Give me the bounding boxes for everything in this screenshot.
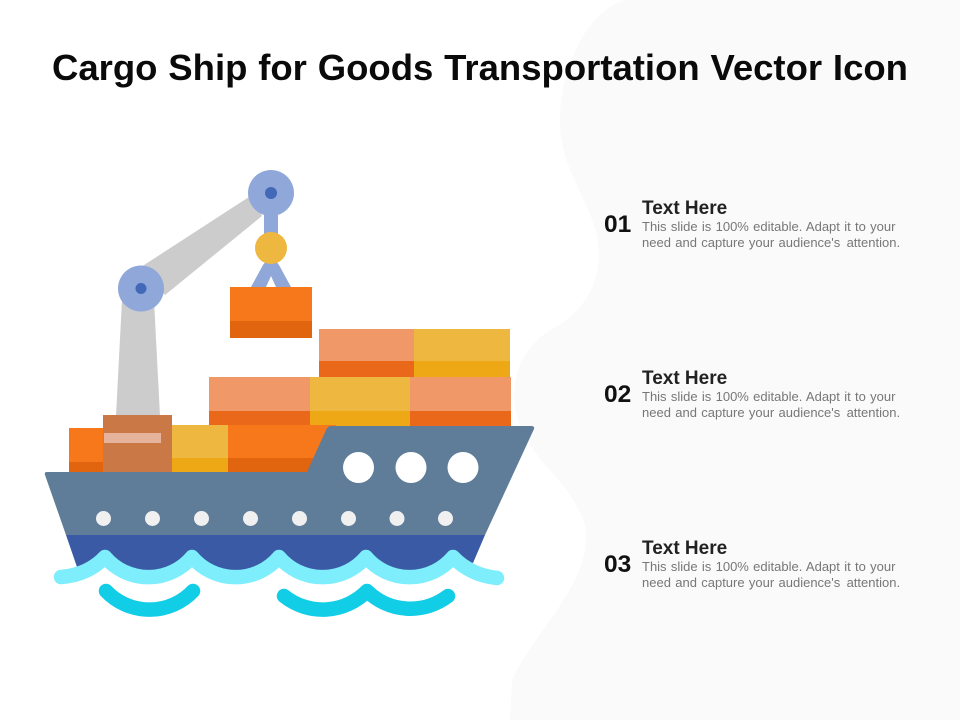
- lower row containers: [69, 415, 336, 473]
- description 03: [642, 559, 900, 590]
- number 03: 03: [604, 551, 631, 578]
- ship waterline: [66, 535, 485, 577]
- middle row containers: [209, 377, 511, 426]
- top row containers: [319, 329, 510, 377]
- description 02: need and capture your audience's attention.: [642, 405, 900, 420]
- item 02: [604, 368, 900, 420]
- heading 03: Text Here: [642, 538, 727, 559]
- dark wave left: [106, 591, 193, 610]
- item 01: [604, 198, 900, 250]
- heading 02: Text Here: [642, 368, 727, 389]
- hanging container: [230, 287, 312, 338]
- description 03: need and capture your audience's attention.: [642, 575, 900, 590]
- description 02: [642, 389, 900, 420]
- title: Cargo Ship for Goods Transportation Vector Icon: [52, 47, 908, 88]
- description 01: This slide is 100% editable. Adapt it to your: [642, 219, 895, 234]
- item 03: [604, 538, 900, 590]
- portholes: [96, 452, 478, 526]
- dark wave right: [284, 591, 448, 610]
- description 01: need and capture your audience's attention.: [642, 235, 900, 250]
- ship hull: [45, 426, 534, 535]
- description 02: This slide is 100% editable. Adapt it to your: [642, 389, 895, 404]
- description 01: [642, 219, 900, 250]
- light wave: [61, 557, 497, 578]
- number 02: 02: [604, 381, 631, 408]
- description 03: This slide is 100% editable. Adapt it to your: [642, 559, 895, 574]
- number 01: 01: [604, 211, 631, 238]
- heading 01: Text Here: [642, 198, 727, 219]
- crane: [116, 170, 294, 416]
